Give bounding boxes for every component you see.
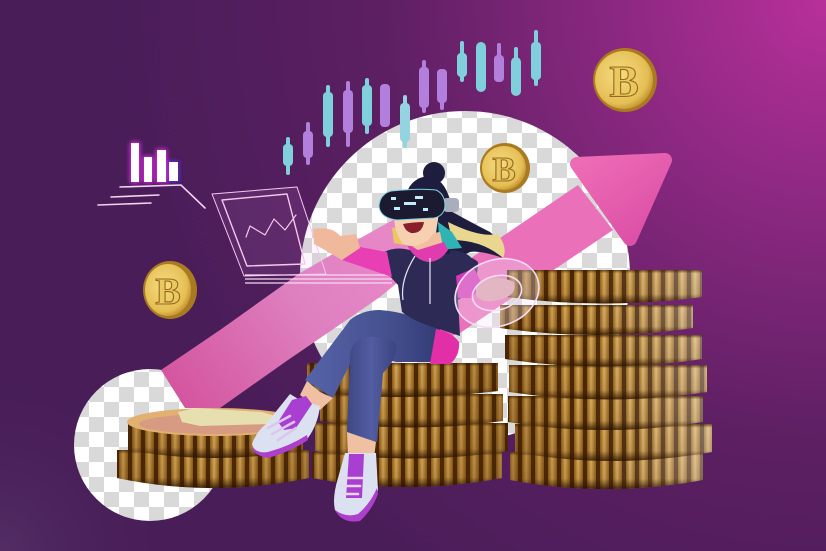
coin: centre [480, 143, 530, 193]
girl character [251, 162, 549, 522]
arrow head [577, 160, 665, 239]
coin: centre: B [492, 150, 516, 189]
back leg [305, 310, 443, 398]
coin: top right [593, 48, 657, 112]
hair top [407, 176, 450, 200]
teal hair [438, 222, 462, 250]
coin stack: right [500, 270, 712, 489]
holographic bubble [445, 247, 549, 339]
VR headset [379, 189, 445, 220]
face [394, 214, 438, 246]
hair bun [423, 162, 445, 184]
palm [476, 278, 515, 301]
left shoe [251, 394, 320, 458]
headset lights [391, 196, 428, 211]
mouth [403, 222, 424, 233]
VR strap [443, 198, 459, 212]
right shoe [334, 453, 378, 522]
drawstrings [402, 256, 430, 304]
left blonde strand [392, 226, 404, 245]
arrow: lower band [161, 216, 425, 408]
laptop hologram [212, 187, 392, 283]
shorts [430, 329, 459, 364]
left sleeve [342, 247, 392, 277]
bar chart icon [98, 142, 205, 208]
hood collar [406, 242, 448, 262]
small checkerboard circle [74, 369, 226, 521]
hand pointing [313, 228, 360, 260]
long hair [435, 205, 503, 262]
blonde strand [448, 222, 505, 258]
candlestick chart [283, 30, 541, 175]
right shoulder [448, 250, 474, 283]
right sleeve and hand [456, 268, 482, 298]
arrow: upper band [425, 185, 613, 340]
coin: left [143, 261, 197, 319]
neck [412, 232, 444, 252]
ankles [300, 381, 376, 458]
front leg [347, 337, 396, 442]
torso hoodie [384, 248, 478, 336]
coin stack: middle [307, 363, 508, 487]
large checkerboard circle [300, 111, 630, 441]
coin: top right: B [609, 57, 639, 106]
coin stack: left [117, 408, 309, 488]
coin: left: B [155, 271, 181, 313]
